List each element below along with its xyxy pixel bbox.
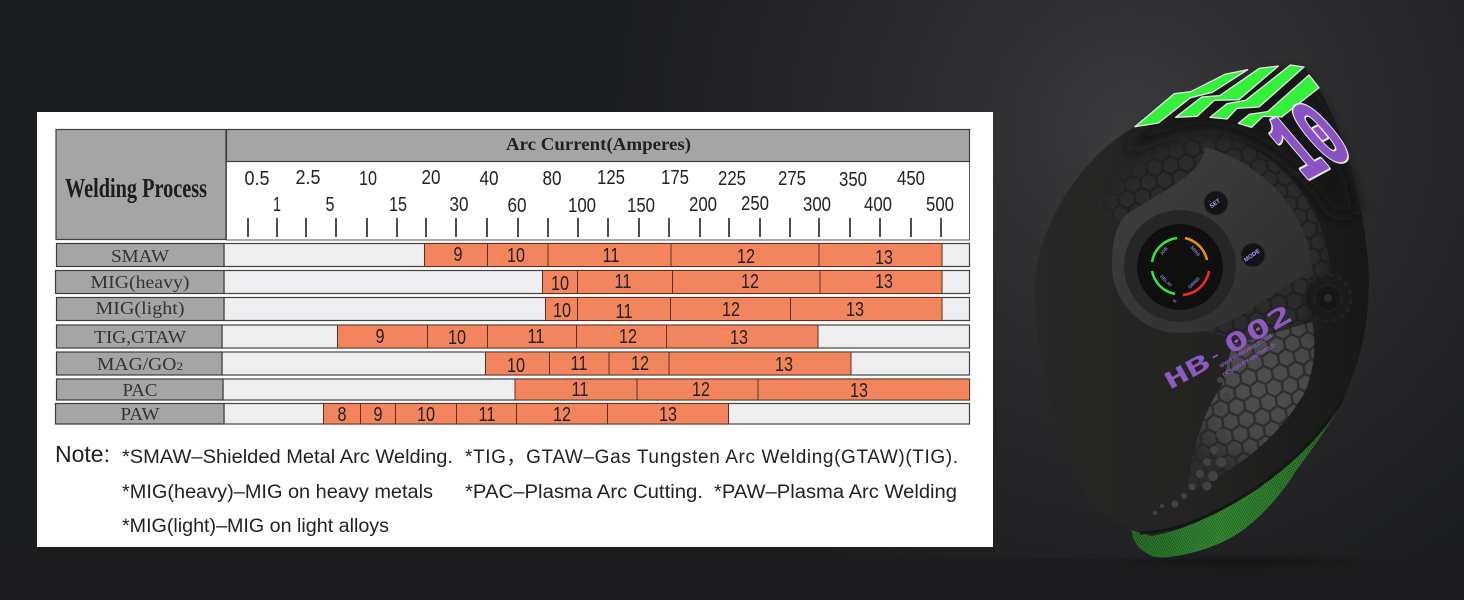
row: MIG heavy <box>56 270 970 295</box>
dial labels: DELAY <box>1159 274 1173 288</box>
amperage scale labels: 300 <box>803 194 831 216</box>
MODE button <box>1241 243 1265 267</box>
row: PAC: 12 <box>692 379 710 401</box>
row: SMAW: 13 <box>875 247 893 269</box>
SET button: SET <box>1209 198 1222 210</box>
dial arc: red <box>1183 271 1209 295</box>
control plate <box>1112 147 1312 333</box>
amperage scale labels: 350 <box>839 169 867 191</box>
dial labels: SENS <box>1189 245 1201 257</box>
row: MAG/CO2: MAG/GO 2 <box>97 354 183 374</box>
dial labels: GRIND <box>1187 276 1201 290</box>
amperage scale labels: 30 <box>450 194 468 216</box>
row: MIG light: 10 <box>553 300 571 322</box>
row: MIG light: 13 <box>846 299 864 321</box>
dial arc: green lower <box>1152 271 1175 294</box>
row: MIG light: 11 <box>616 301 632 323</box>
row: MAG/CO2: 13 <box>775 354 793 376</box>
logo: green stripes <box>1135 65 1319 127</box>
row: MAG/CO2 <box>56 352 970 377</box>
amperage scale labels: 1 <box>273 194 281 216</box>
note text block <box>55 441 958 537</box>
logo: purple number: 10 <box>1249 87 1376 205</box>
dark top band behind logo <box>1125 72 1358 215</box>
helmet shell <box>1035 66 1369 536</box>
note text block: *MIG(light)–MIG on light alloys <box>122 516 389 537</box>
dial arc: orange <box>1185 238 1207 260</box>
amperage scale labels: 150 <box>627 195 655 217</box>
heading: arc current <box>226 130 970 240</box>
amperage scale labels: 225 <box>718 168 746 190</box>
amperage scale labels: 500 <box>926 194 954 216</box>
row: TIG, GTAW: TIG,GTAW <box>94 327 186 347</box>
floor band <box>0 559 1464 600</box>
row: MIG heavy: 11 <box>614 271 632 293</box>
row: PAW: 10 <box>417 404 435 426</box>
row: PAC: 13 <box>850 380 868 402</box>
row: MIG light <box>56 298 970 323</box>
row: SMAW: 10 <box>507 245 525 267</box>
welding helmet illustration <box>1035 65 1376 571</box>
lower hexagon field <box>1188 322 1314 490</box>
amperage scale labels: 10 <box>359 168 377 190</box>
note text block: *PAC–Plasma Arc Cutting. <box>465 482 703 503</box>
row: SMAW: 11 <box>602 245 620 267</box>
floor shadow <box>1110 551 1370 571</box>
LED green band <box>1132 397 1345 557</box>
row: MIG heavy: 13 <box>875 271 893 293</box>
note text block: *PAW–Plasma Arc Welding <box>714 482 957 503</box>
note text block: *TIG，GTAW–Gas Tungsten Arc Welding(GTAW)(TIG). <box>465 447 958 468</box>
model name: DESIGN BY UNITWELD <box>1222 343 1276 379</box>
row: PAW <box>56 404 970 426</box>
amperage scale labels: 0.5 <box>244 168 270 190</box>
dial labels <box>1159 245 1201 304</box>
amperage scale labels: 275 <box>778 168 806 190</box>
note text block: Note: <box>55 441 110 467</box>
amperage scale labels: 100 <box>568 195 596 217</box>
row: MIG light: MIG(light) <box>96 298 184 319</box>
heading: arc current: Arc Current(Amperes) <box>506 134 691 155</box>
panel: shade guide chart <box>37 112 993 547</box>
row: SMAW: 9 <box>454 244 462 266</box>
MODE button: MODE <box>1243 249 1262 264</box>
row: SMAW: 12 <box>737 246 755 268</box>
amperage scale ticks <box>248 218 941 237</box>
row: TIG, GTAW <box>56 325 970 349</box>
amperage scale labels: 125 <box>597 167 625 189</box>
dial labels: JOB <box>1159 245 1169 256</box>
row: MIG heavy: 12 <box>741 271 759 293</box>
amperage scale labels: 250 <box>741 193 769 215</box>
row: MIG light: 12 <box>722 299 740 321</box>
row: PAC: 11 <box>572 379 588 401</box>
row: MAG/CO2: 12 <box>631 353 649 375</box>
SET button <box>1204 191 1228 215</box>
row: MAG/CO2: 11 <box>570 353 588 375</box>
dial labels: S <box>1172 299 1178 304</box>
row: PAW: 13 <box>659 404 677 426</box>
note text block: *SMAW–Shielded Metal Arc Welding. <box>122 447 453 468</box>
heading: welding process <box>56 130 226 240</box>
logo: purple number outline: 10 <box>1249 87 1376 205</box>
row: MAG/CO2: 10 <box>507 355 525 377</box>
amperage scale labels: 400 <box>864 194 892 216</box>
heading: welding process: Welding Process <box>65 173 207 203</box>
row: PAW: 8 <box>338 404 346 426</box>
amperage scale labels <box>244 167 954 217</box>
amperage scale labels: 60 <box>508 195 526 217</box>
note text block: *MIG(heavy)–MIG on heavy metals <box>122 482 433 503</box>
row: PAW: 11 <box>478 404 496 426</box>
row: PAC: PAC <box>122 380 158 400</box>
dial arc: green upper <box>1152 238 1177 262</box>
row: TIG, GTAW: 12 <box>619 326 637 348</box>
amperage scale labels: 15 <box>389 194 407 216</box>
row: TIG, GTAW: 10 <box>448 327 466 349</box>
amperage scale labels: 5 <box>326 194 334 216</box>
hexagon band around control plate <box>1161 142 1330 340</box>
model name: 002 <box>1219 299 1298 360</box>
row: PAW: PAW <box>120 404 160 424</box>
amperage scale labels: 80 <box>542 168 562 190</box>
row: MIG heavy: 10 <box>551 273 569 295</box>
scattered hexagon dots <box>1153 377 1232 515</box>
row: SMAW <box>56 244 970 269</box>
amperage scale labels: 450 <box>897 168 925 190</box>
adjustment knob <box>1305 275 1351 321</box>
amperage scale labels: 175 <box>661 167 689 189</box>
row: PAC <box>56 379 970 402</box>
row: PAW: 9 <box>374 404 382 426</box>
amperage scale labels: 2.5 <box>296 167 320 189</box>
row: MIG heavy: MIG(heavy) <box>90 272 190 293</box>
row: TIG, GTAW: 11 <box>528 326 544 348</box>
model name: WWW.HTPROWELD.COM <box>1219 333 1274 370</box>
amperage scale labels: 20 <box>422 167 440 189</box>
row: TIG, GTAW: 13 <box>730 327 748 349</box>
model name: HB <box>1160 349 1215 395</box>
amperage scale labels: 40 <box>480 168 498 190</box>
row: PAW: 12 <box>553 404 571 426</box>
row: TIG, GTAW: 9 <box>376 326 384 348</box>
dark rim above LED band <box>1140 398 1343 533</box>
amperage scale labels: 200 <box>689 194 717 216</box>
model name: - <box>1207 347 1223 365</box>
row: SMAW: SMAW <box>111 246 169 266</box>
model name <box>1160 299 1298 395</box>
dial <box>1124 210 1236 322</box>
